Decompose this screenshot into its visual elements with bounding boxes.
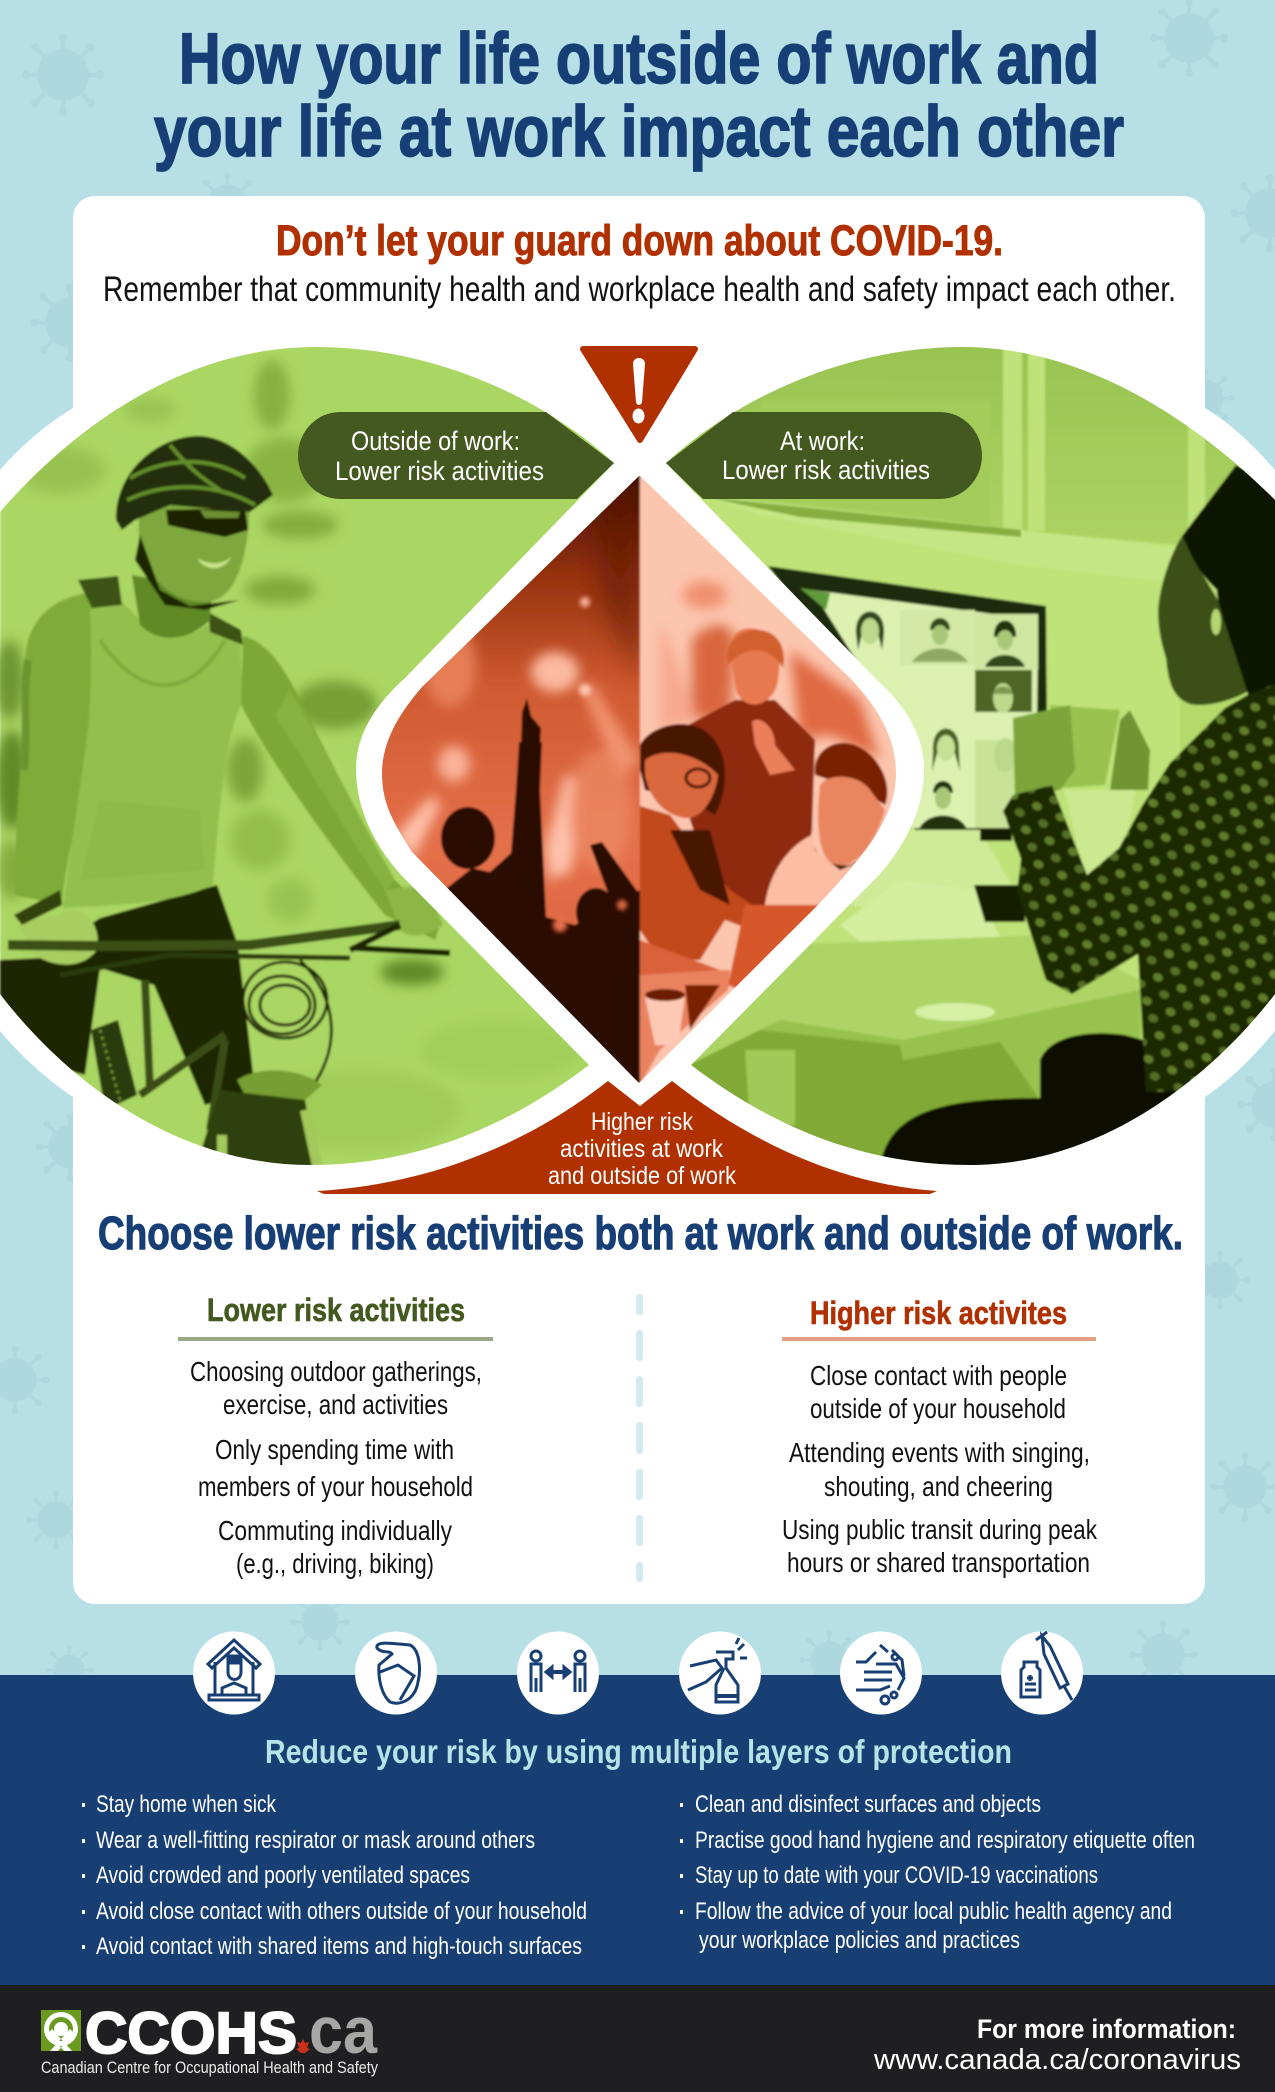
- bullet list right: Stay up to date with your COVID-19 vaccinations: [695, 1862, 1098, 1889]
- footer bar: [0, 1985, 1275, 2092]
- protection band: [0, 1675, 1275, 1985]
- table and cup: [640, 970, 730, 1085]
- photo: higher risk concert and office: [370, 470, 910, 1090]
- icon row: [193, 1632, 1083, 1714]
- photo: woman on video call at work: [660, 340, 1275, 1180]
- white venn outline: [0, 408, 1275, 1097]
- right arm: [241, 636, 440, 940]
- icon: physical distancing: [517, 1632, 599, 1714]
- shelf underside: [726, 502, 1174, 580]
- face: [1158, 536, 1250, 705]
- bullet list left: Avoid contact with shared items and high-touch surfaces: [96, 1933, 582, 1960]
- lower left pill: outside of work: Outside of work:: [351, 426, 520, 456]
- monitor: [768, 566, 1048, 830]
- bullet list left: Avoid close contact with others outside of your household: [96, 1898, 587, 1925]
- icon: face mask: [355, 1632, 437, 1714]
- column: lower risk activities: exercise, and activities: [223, 1389, 448, 1420]
- laptop: [728, 905, 820, 990]
- cable coil: [215, 960, 331, 1090]
- legs and shorts: [0, 885, 255, 1105]
- lower left pill: outside of work: Lower risk activities: [335, 456, 544, 486]
- higher risk heading: Higher risk activites: [810, 1295, 1067, 1331]
- more information: For more information:: [977, 2014, 1236, 2044]
- higher risk red callout: [317, 1081, 937, 1194]
- bullet list left: Wear a well-fitting respirator or mask around others: [96, 1827, 535, 1854]
- bullet list right: [680, 1791, 1195, 1954]
- more information: www.canada.ca/coronavirus: [873, 2044, 1241, 2076]
- white card: [73, 196, 1205, 1604]
- fist: [18, 910, 98, 965]
- right hand: [385, 885, 443, 935]
- column: higher risk activities: Using public transit during peak: [782, 1514, 1098, 1545]
- bullet list left: Avoid crowded and poorly ventilated spaces: [96, 1862, 470, 1889]
- icon: disinfectant spray: [679, 1632, 761, 1714]
- standing woman: [688, 700, 815, 905]
- column: lower risk activities: [178, 1292, 493, 1579]
- lower risk heading: Lower risk activities: [207, 1292, 465, 1328]
- woman with glasses: [640, 724, 725, 815]
- man: [815, 743, 887, 805]
- bike frame: [140, 980, 225, 1130]
- bullet list left: [82, 1791, 587, 1960]
- subheading: Don’t let your guard down about COVID-19.: [276, 217, 1003, 265]
- woman's patterned blouse: [1003, 676, 1275, 1092]
- neck and face: [132, 575, 212, 638]
- column: lower risk activities: Commuting individually: [218, 1515, 452, 1546]
- higher risk red callout: activities at work: [560, 1135, 723, 1163]
- cup and hands: [1050, 705, 1120, 788]
- column: lower risk activities: Only spending time with: [215, 1434, 454, 1465]
- stand and paper: [850, 828, 1012, 907]
- column: higher risk activities: hours or shared transportation: [787, 1547, 1090, 1578]
- CCOHS logo: [41, 1993, 378, 2077]
- icon: warning triangle: [583, 349, 695, 440]
- column: higher risk activities: outside of your household: [810, 1393, 1066, 1424]
- CCOHS logo: CCOHS: [85, 2001, 297, 2066]
- title: [154, 20, 1124, 172]
- straps: [78, 576, 243, 645]
- saddle and fork: [237, 1070, 322, 1100]
- column: higher risk activities: Close contact with people: [810, 1360, 1067, 1391]
- wheel: [91, 1020, 137, 1110]
- CCOHS logo: ca: [309, 1993, 378, 2067]
- handlebars: [8, 925, 400, 946]
- column: higher risk activities: [782, 1295, 1098, 1578]
- bullet list right: your workplace policies and practices: [699, 1927, 1020, 1954]
- lower right pill: at work: At work:: [780, 426, 865, 456]
- sunglasses: [166, 508, 248, 537]
- icon: vaccine: [1001, 1632, 1083, 1714]
- concert half: [382, 476, 642, 926]
- lower right pill: at work: [666, 412, 982, 499]
- CCOHS logo: Canadian Centre for Occupational Health and Safety: [41, 2058, 378, 2077]
- bullet list right: Clean and disinfect surfaces and objects: [695, 1791, 1041, 1818]
- heading: reduce your risk: Reduce your risk by using multiple layers of protection: [265, 1733, 1012, 1770]
- column: higher risk activities: shouting, and cheering: [824, 1471, 1053, 1502]
- higher risk red callout: and outside of work: [548, 1162, 736, 1190]
- helmet: [116, 436, 273, 530]
- more information: [873, 2014, 1241, 2076]
- crowd silhouette: [430, 698, 640, 1090]
- office half: [640, 470, 910, 1090]
- desk: [692, 934, 1145, 1066]
- column: lower risk activities: Choosing outdoor gatherings,: [190, 1356, 482, 1387]
- cabinets: [666, 347, 1246, 545]
- left arm: [14, 592, 97, 905]
- hair: [1182, 465, 1275, 695]
- photo: cyclist outside of work: [0, 340, 620, 1170]
- chair: [881, 1032, 1179, 1165]
- lower right pill: at work: Lower risk activities: [722, 455, 930, 485]
- tank top: [63, 600, 243, 908]
- icon: hand washing: [840, 1632, 922, 1714]
- column: lower risk activities: (e.g., driving, biking): [236, 1548, 434, 1579]
- lower left pill: outside of work: [298, 412, 614, 499]
- higher risk red callout: Higher risk: [591, 1108, 693, 1136]
- icon: stay home: [193, 1632, 275, 1714]
- subheading: [103, 217, 1176, 309]
- column: lower risk activities: members of your household: [198, 1471, 473, 1502]
- column: higher risk activities: Attending events with singing,: [789, 1437, 1090, 1468]
- bullet list left: Stay home when sick: [96, 1791, 277, 1818]
- bullet list right: Follow the advice of your local public health agency and: [695, 1898, 1172, 1925]
- screen faces: [856, 612, 884, 650]
